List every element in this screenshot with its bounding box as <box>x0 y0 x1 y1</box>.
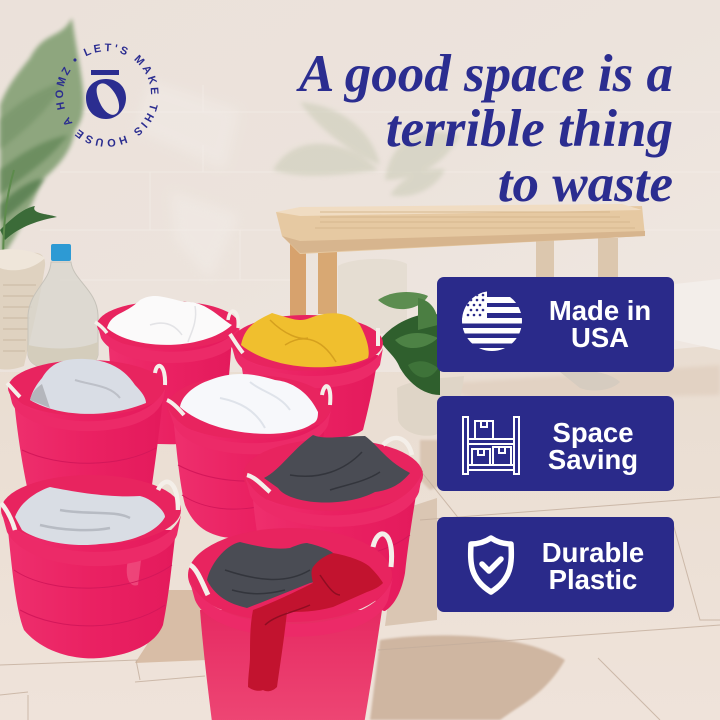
title: A good space is a <box>299 45 673 103</box>
badge: Durable Plastic <box>437 517 674 612</box>
tub: centre with white cloth <box>167 374 331 538</box>
wall <box>0 0 720 400</box>
pale background plant and pot <box>273 102 460 334</box>
label: USA <box>571 322 629 353</box>
label: Plastic <box>549 564 637 595</box>
bench <box>276 204 645 320</box>
title: terrible thing <box>386 100 673 158</box>
right wall bath ledge <box>675 279 720 350</box>
icon: US flag globe <box>462 292 522 351</box>
tub: right with dark cloth <box>243 435 423 611</box>
label: Durable <box>542 537 644 568</box>
title: to waste <box>498 155 673 213</box>
small plant with pot <box>378 292 464 436</box>
tub: front left with gray cloth <box>1 475 181 658</box>
tub: left with light gray cloth <box>7 359 166 500</box>
label: Saving <box>548 444 638 475</box>
floor shadow patches <box>135 590 207 663</box>
label <box>542 537 644 595</box>
title <box>296 45 673 213</box>
logo mark <box>86 70 126 119</box>
label <box>549 295 651 353</box>
tub: back right with yellow towel <box>230 313 383 440</box>
tub: front with dark cloth and red lace <box>188 528 393 720</box>
plant: left foliage <box>0 18 84 272</box>
badge: Made in USA <box>437 277 674 372</box>
circular slogan: • LET'S MAKE THIS HOUSE A HOMZ <box>55 44 159 147</box>
label: Space <box>552 417 634 448</box>
floor <box>0 345 720 720</box>
label: Made in <box>549 295 651 326</box>
icon: shelves with boxes <box>462 416 520 475</box>
badge: Space Saving <box>437 396 674 491</box>
icon: shield with check <box>468 535 514 595</box>
glass bottle <box>28 244 98 369</box>
label <box>548 417 638 475</box>
left planter <box>0 253 45 370</box>
tub: back centre with white towel <box>95 296 240 444</box>
